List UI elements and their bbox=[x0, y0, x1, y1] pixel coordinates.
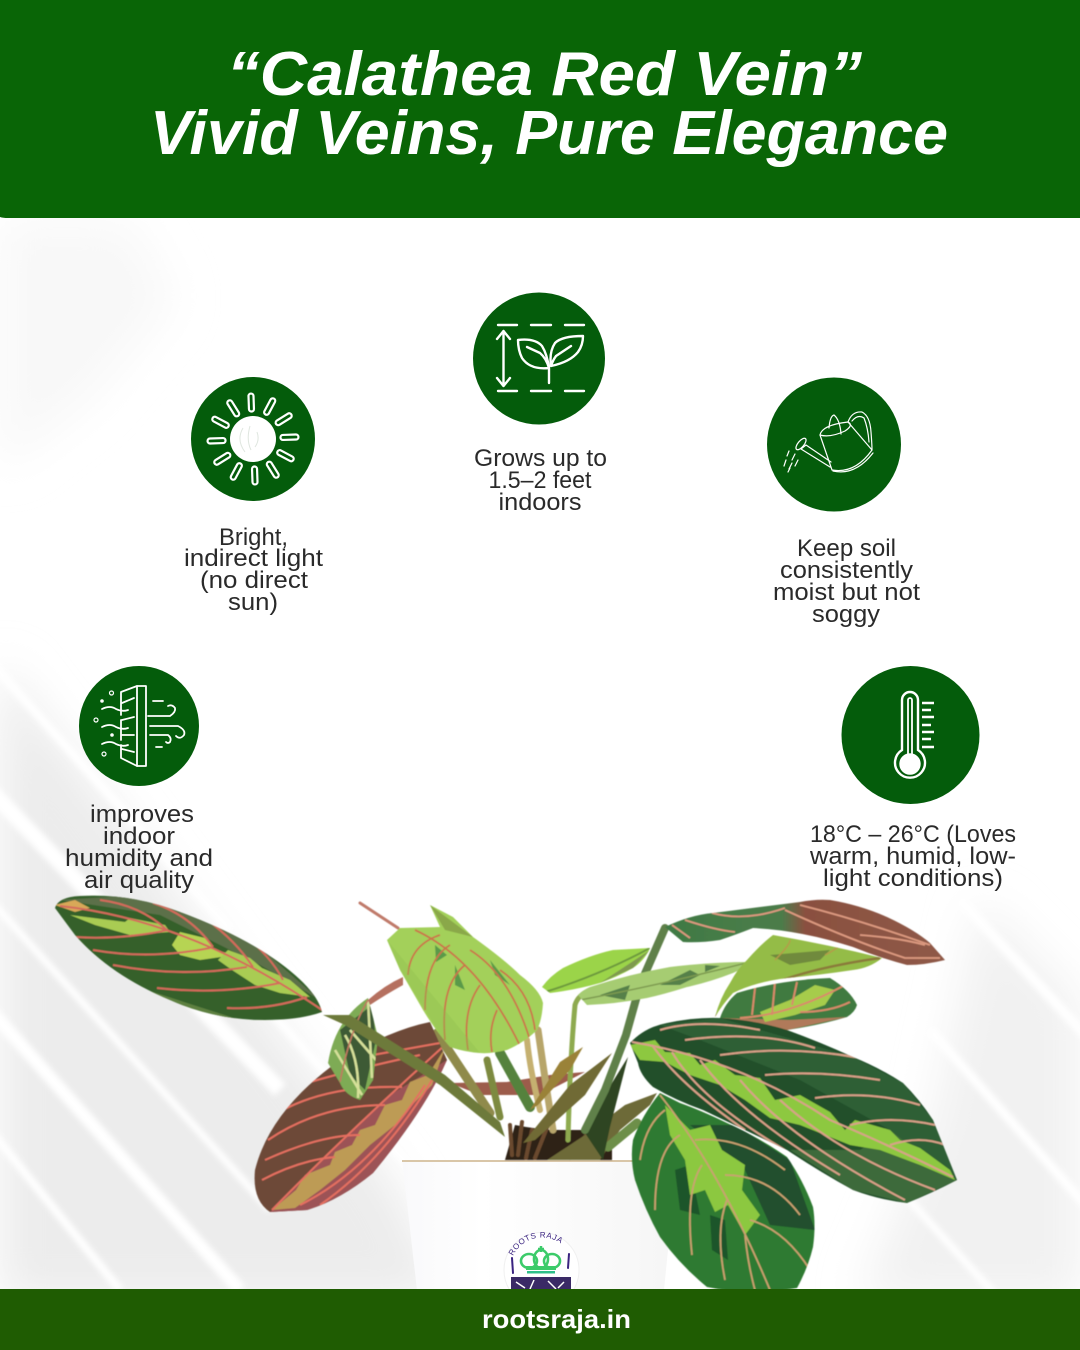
leaf: slim variegated bbox=[578, 961, 746, 1006]
logo sticker: ROOTS RAJA bbox=[508, 1232, 562, 1256]
soil and stems bbox=[437, 990, 657, 1160]
icon: thermometer bbox=[842, 666, 980, 804]
text: height: indoors bbox=[498, 489, 582, 516]
text: temperature bbox=[809, 821, 1016, 892]
title: “Calathea Red Vein” bbox=[227, 40, 862, 109]
text: light: Bright, bbox=[219, 524, 288, 551]
text: air quality: indoor bbox=[103, 823, 175, 850]
leaf: mid right patterned bbox=[720, 977, 858, 1031]
leaf: small folded bbox=[327, 998, 378, 1100]
text: water: moist but not bbox=[773, 579, 920, 606]
text: height bbox=[474, 445, 607, 516]
item: height bbox=[473, 292, 607, 516]
pot bbox=[402, 1160, 668, 1289]
text: temperature: light conditions) bbox=[823, 865, 1003, 892]
text: air quality: air quality bbox=[84, 867, 194, 894]
logo sticker bbox=[504, 1232, 580, 1289]
leaf: center stalk pink bbox=[360, 903, 398, 928]
leaf: upper right lime bbox=[712, 930, 884, 1020]
stem: left leaf petiole bbox=[323, 1015, 505, 1137]
text: water bbox=[773, 535, 920, 628]
text: height: Grows up to bbox=[474, 445, 607, 472]
title bbox=[150, 40, 948, 168]
title: Vivid Veins, Pure Elegance bbox=[150, 99, 948, 168]
text: air quality bbox=[65, 801, 213, 894]
text: air quality: improves bbox=[90, 801, 194, 828]
leaf: small lime bbox=[540, 945, 652, 995]
leaf: center light green bbox=[385, 900, 547, 1058]
icon: sun bbox=[191, 377, 315, 501]
item: temperature bbox=[809, 666, 1016, 892]
footer bar bbox=[0, 1289, 1080, 1350]
text: temperature: 18°C – 26°C (Loves bbox=[810, 821, 1016, 848]
leaf: top right red and green bbox=[665, 898, 946, 966]
text: water: Keep soil bbox=[797, 535, 896, 562]
item: light bbox=[184, 377, 323, 616]
item: water bbox=[767, 378, 920, 628]
footer url: rootsraja.in bbox=[482, 1304, 631, 1334]
icon: air filter bbox=[79, 666, 199, 786]
text: water: consistently bbox=[780, 557, 913, 584]
leaf: lower left red bbox=[250, 1015, 455, 1215]
text: light: (no direct bbox=[200, 567, 308, 594]
leaf: bottom right bbox=[625, 1090, 820, 1295]
header banner bbox=[0, 0, 1080, 218]
text: air quality: humidity and bbox=[65, 845, 213, 872]
stem: tall upright bbox=[585, 928, 665, 1130]
plant bbox=[50, 890, 960, 1295]
leaf: large right bbox=[625, 1015, 960, 1210]
item: air quality bbox=[65, 666, 213, 894]
leaf: top left bbox=[50, 890, 330, 1025]
text: light bbox=[184, 524, 323, 616]
text: temperature: warm, humid, low- bbox=[809, 843, 1016, 870]
text: water: soggy bbox=[812, 601, 880, 628]
text: light: indirect light bbox=[184, 545, 323, 572]
icon: plant height bbox=[473, 292, 605, 424]
icon: watering can bbox=[767, 378, 901, 512]
text: height: 1.5–2 feet bbox=[488, 467, 592, 494]
text: light: sun) bbox=[228, 589, 278, 616]
